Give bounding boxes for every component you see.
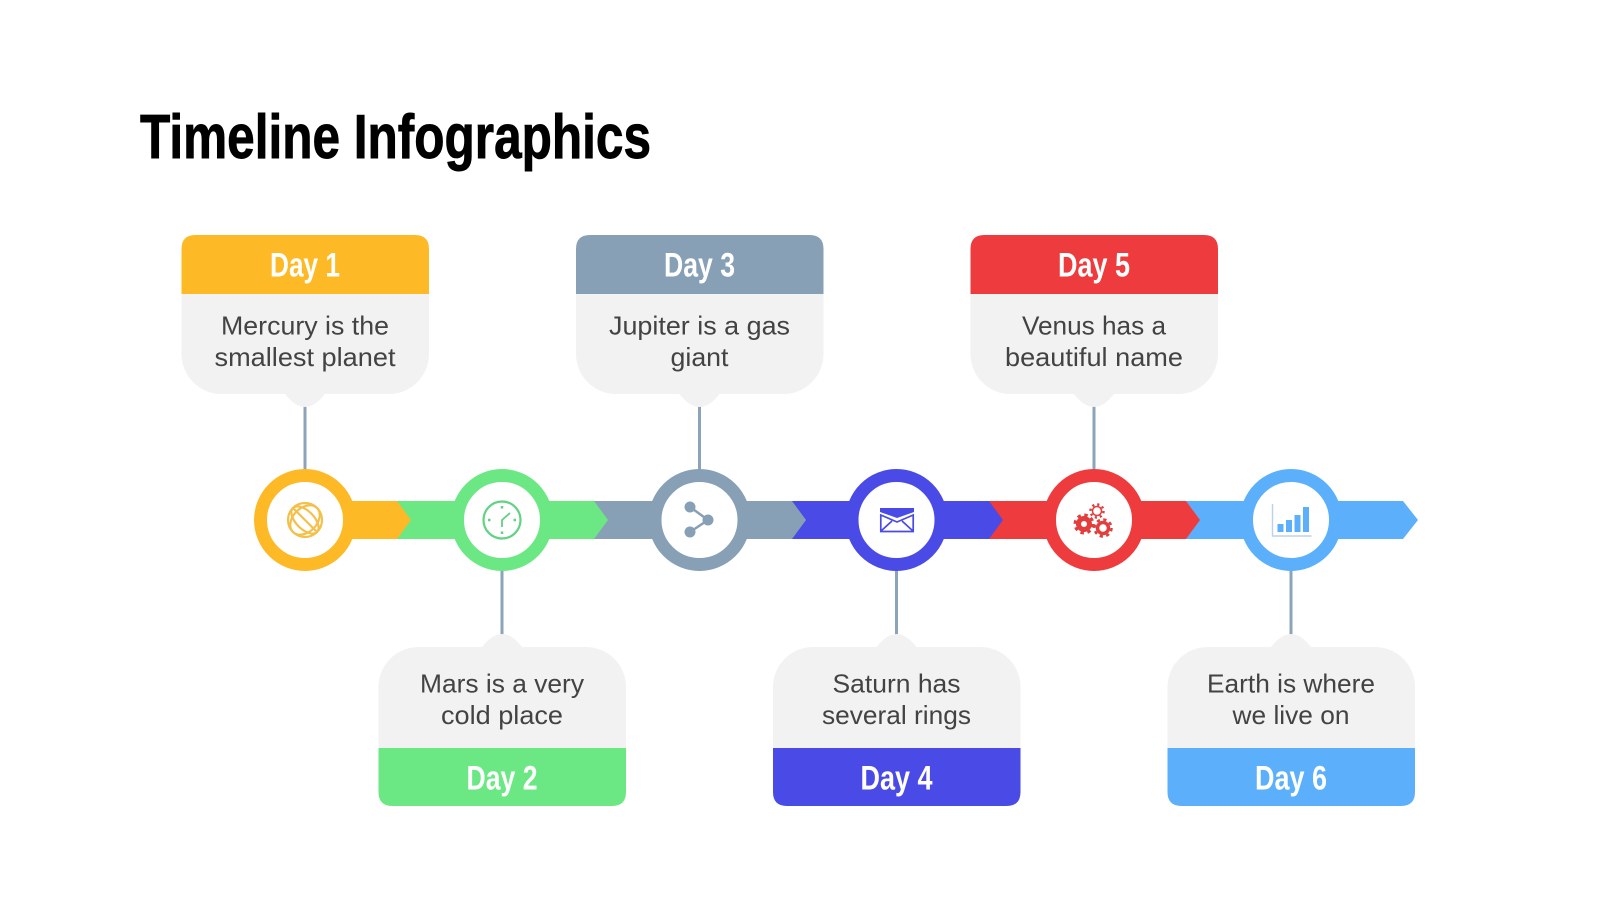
icon: share (685, 502, 713, 537)
arrow segment 3 (594, 501, 806, 539)
description: beautiful name (1005, 342, 1183, 372)
arrow segment 1 (305, 501, 411, 539)
card body (182, 280, 429, 407)
card: Day 1 (182, 235, 429, 407)
description: several rings (822, 700, 971, 730)
description: we live on (1231, 700, 1350, 730)
icon: globe (284, 499, 326, 541)
card body (378, 634, 626, 760)
description: smallest planet (214, 342, 396, 372)
description: Mercury is the (221, 310, 389, 340)
card header (576, 235, 824, 294)
arrow segment 4 (792, 501, 1003, 539)
timeline arrow band (305, 501, 1418, 539)
description (609, 310, 790, 372)
description (214, 310, 396, 372)
node 3 ring (655, 476, 744, 564)
description: Mars is a very (420, 668, 584, 698)
header label: Day 3 (664, 246, 735, 284)
node 5 ring (1050, 476, 1138, 564)
node 6 ring (1246, 476, 1336, 564)
icon: clock (484, 502, 520, 538)
footer label: Day 4 (860, 760, 933, 798)
title: Timeline Infographics (140, 103, 651, 172)
footer label: Day 2 (466, 760, 538, 798)
description: cold place (441, 700, 563, 730)
card body (773, 634, 1020, 760)
icon: gears (1075, 504, 1112, 536)
card body (970, 280, 1218, 407)
description (420, 668, 584, 730)
card header (182, 235, 429, 294)
card: Day 6 (1168, 634, 1415, 806)
arrow segment 5 (989, 501, 1200, 539)
card: Day 3 (576, 235, 824, 407)
description: Earth is where (1207, 668, 1375, 698)
card: Day 4 (773, 634, 1020, 806)
card header (970, 235, 1218, 294)
card footer (378, 748, 626, 806)
icon: bar chart (1272, 504, 1312, 536)
card footer (1168, 748, 1415, 806)
node 1 ring (260, 476, 350, 564)
description (822, 668, 971, 730)
card footer (773, 748, 1020, 806)
description: Venus has a (1022, 310, 1167, 340)
arrow segment 2 (397, 501, 608, 539)
node 4 ring (852, 476, 941, 564)
card: Day 5 (970, 235, 1218, 407)
description (1005, 310, 1183, 372)
description: giant (670, 342, 729, 372)
header label: Day 5 (1058, 246, 1130, 284)
card: Day 2 (378, 634, 626, 806)
header label: Day 1 (270, 246, 340, 284)
icon: envelope (880, 508, 914, 532)
card body (1168, 634, 1415, 760)
node 2 ring (458, 476, 546, 564)
card body (576, 280, 824, 407)
footer label: Day 6 (1255, 760, 1327, 798)
description (1207, 668, 1375, 730)
arrow segment 6 (1186, 501, 1418, 539)
connector lines (305, 405, 1291, 636)
description: Saturn has (832, 668, 960, 698)
description: Jupiter is a gas (609, 310, 790, 340)
